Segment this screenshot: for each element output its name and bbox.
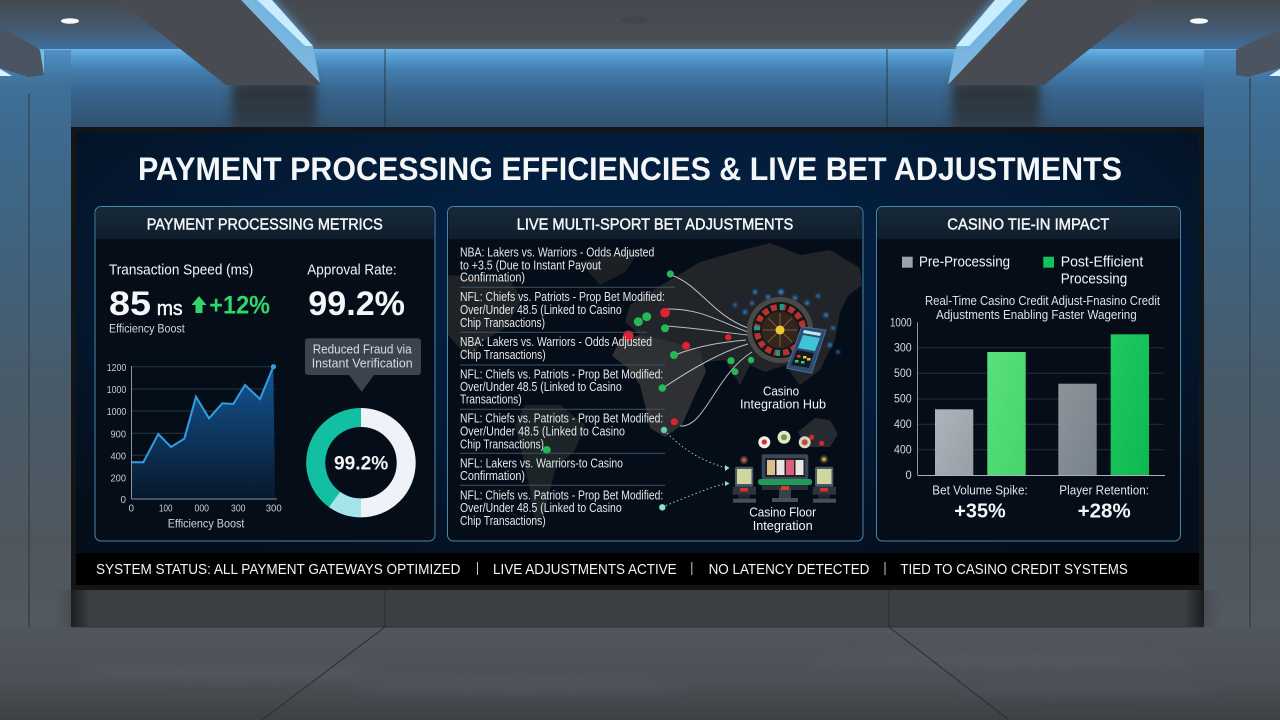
line chart: efficiency boost: 0	[120, 494, 126, 506]
panel: live multi-sport bet adjustments	[448, 206, 863, 541]
bet adjustment list: NFL: Chiefs vs. Patriots - Prop Bet Modified:	[460, 290, 665, 304]
bet adjustment list: NBA: Lakers vs. Warriors - Odds Adjusted	[460, 246, 654, 260]
bet adjustment list: NBA: Lakers vs. Warriors - Odds Adjusted	[460, 335, 652, 349]
dotted connection lines to casino floor	[662, 430, 730, 507]
line chart: efficiency boost: 200	[110, 472, 126, 484]
bet adjustment list: Chip Transactions)	[460, 348, 546, 362]
bet adjustment list: to +3.5 (Due to Instant Payout	[460, 258, 601, 272]
bet adjustment list: Over/Under 48.5 (Linked to Casino	[460, 380, 622, 394]
panel: casino tie-in impact	[876, 206, 1180, 541]
connection lines to hub	[663, 275, 752, 426]
bet adjustment list: NFL: Chiefs vs. Patriots - Prop Bet Modified:	[460, 367, 663, 381]
bet adjustment list: Confirmation)	[460, 469, 525, 483]
label: casino integration hub: Casino	[763, 384, 799, 399]
bet adjustment list	[460, 246, 675, 528]
bet adjustment list: Transactions)	[460, 393, 522, 407]
line chart: efficiency boost: 1000	[107, 384, 126, 396]
heading: casino tie-in impact: CASINO TIE-IN IMPACT	[947, 216, 1110, 233]
chart subtitle	[925, 294, 1160, 322]
status bar: NO LATENCY DETECTED	[709, 562, 869, 578]
line chart: efficiency boost: 400	[110, 450, 126, 462]
bar chart: 400	[894, 442, 912, 456]
callout: reduced fraud: Instant Verification	[312, 357, 413, 371]
status bar: LIVE ADJUSTMENTS ACTIVE	[493, 562, 677, 578]
bet adjustment list: Chip Transactions)	[460, 437, 544, 451]
status dots on map	[543, 270, 824, 510]
bet adjustment list: Chip Transactions)	[460, 514, 546, 528]
label: casino integration hub	[740, 384, 826, 412]
line chart: efficiency boost: 300	[266, 503, 282, 515]
status bar: TIED TO CASINO CREDIT SYSTEMS	[900, 562, 1128, 578]
stat: player retention	[1059, 482, 1149, 522]
label: casino floor integration	[749, 505, 817, 533]
label: casino integration hub: Integration Hub	[740, 397, 826, 412]
icon: casino integration hub	[733, 290, 840, 373]
donut chart: approval rate	[316, 417, 406, 508]
metric: transaction speed: Efficiency Boost	[109, 323, 185, 335]
legend: Processing	[1061, 271, 1127, 287]
callout: reduced fraud: Reduced Fraud via	[313, 342, 412, 356]
stat: bet volume spike	[932, 482, 1028, 522]
stat: player retention: +28%	[1078, 500, 1131, 522]
legend: Post-Efficient	[1061, 255, 1143, 271]
metric: transaction speed: Transaction Speed (ms)	[109, 262, 253, 279]
bet adjustment list: NFL: Chiefs vs. Patriots - Prop Bet Modified:	[460, 412, 663, 426]
bar chart: 300	[894, 341, 912, 355]
metric: approval rate: Approval Rate:	[307, 262, 397, 279]
chart subtitle: Real-Time Casino Credit Adjust-Fnasino Credit	[925, 294, 1160, 308]
line chart: efficiency boost: 000	[194, 503, 209, 515]
line chart: efficiency boost: 0	[128, 503, 134, 515]
heading: payment processing metrics: PAYMENT PROCESSING METRICS	[147, 216, 383, 233]
heading: live multi-sport bet adjustments: LIVE MULTI-SPORT BET ADJUSTMENTS	[517, 216, 793, 233]
bet adjustment list: Over/Under 48.5 (Linked to Casino	[460, 424, 625, 438]
bar chart: 500	[894, 392, 912, 406]
bet adjustment list: NFL: Chiefs vs. Patriots - Prop Bet Modified:	[460, 488, 663, 502]
chart subtitle: Adjustments Enabling Faster Wagering	[936, 308, 1137, 322]
line chart: efficiency boost: 300	[231, 503, 246, 515]
stat: bet volume spike: +35%	[954, 500, 1006, 522]
line chart: efficiency boost: 1000	[107, 406, 126, 418]
icon: casino floor slot machines	[733, 431, 836, 503]
panel: payment processing metrics	[95, 206, 435, 541]
line chart: efficiency boost: 100	[159, 503, 173, 515]
bet adjustment list: Over/Under 48.5 (Linked to Casino	[460, 501, 622, 515]
bar chart: 0	[906, 468, 912, 482]
metric: transaction speed	[109, 262, 270, 335]
metric: approval rate	[307, 262, 405, 323]
world map	[448, 243, 862, 525]
legend	[902, 255, 1143, 287]
bar chart: 1000	[890, 316, 912, 330]
stat: player retention: Player Retention:	[1059, 482, 1149, 497]
status bar	[76, 553, 1199, 585]
bet adjustment list: Confirmation)	[460, 271, 525, 285]
bar chart: 500	[894, 366, 912, 380]
metric: transaction speed: +12%	[209, 291, 270, 319]
bet adjustment list: NFL: Lakers vs. Warriors-to Casino	[460, 456, 623, 470]
bar chart: 400	[894, 417, 912, 431]
metric: transaction speed: 85	[109, 285, 151, 323]
line chart: efficiency boost: Efficiency Boost	[168, 516, 245, 530]
metric: transaction speed: ms	[157, 298, 183, 320]
metric: approval rate: 99.2%	[308, 285, 405, 323]
line chart: efficiency boost	[107, 362, 282, 530]
bet adjustment list: Chip Transactions)	[460, 316, 545, 330]
label: casino floor integration: Casino Floor	[749, 505, 817, 520]
line chart: efficiency boost: 1200	[107, 362, 126, 374]
title: PAYMENT PROCESSING EFFICIENCIES & LIVE BET ADJUSTMENTS	[138, 151, 1122, 187]
status bar: SYSTEM STATUS: ALL PAYMENT GATEWAYS OPTIMIZED	[96, 562, 460, 578]
stat: bet volume spike: Bet Volume Spike:	[932, 482, 1028, 497]
callout: reduced fraud	[305, 338, 421, 392]
legend: Pre-Processing	[919, 255, 1010, 271]
display screen	[71, 127, 1204, 590]
bar chart	[890, 316, 1165, 482]
donut chart: approval rate: 99.2%	[334, 453, 388, 474]
bet adjustment list: Over/Under 48.5 (Linked to Casino	[460, 303, 622, 317]
label: casino floor integration: Integration	[753, 518, 813, 533]
line chart: efficiency boost: 900	[110, 428, 126, 440]
